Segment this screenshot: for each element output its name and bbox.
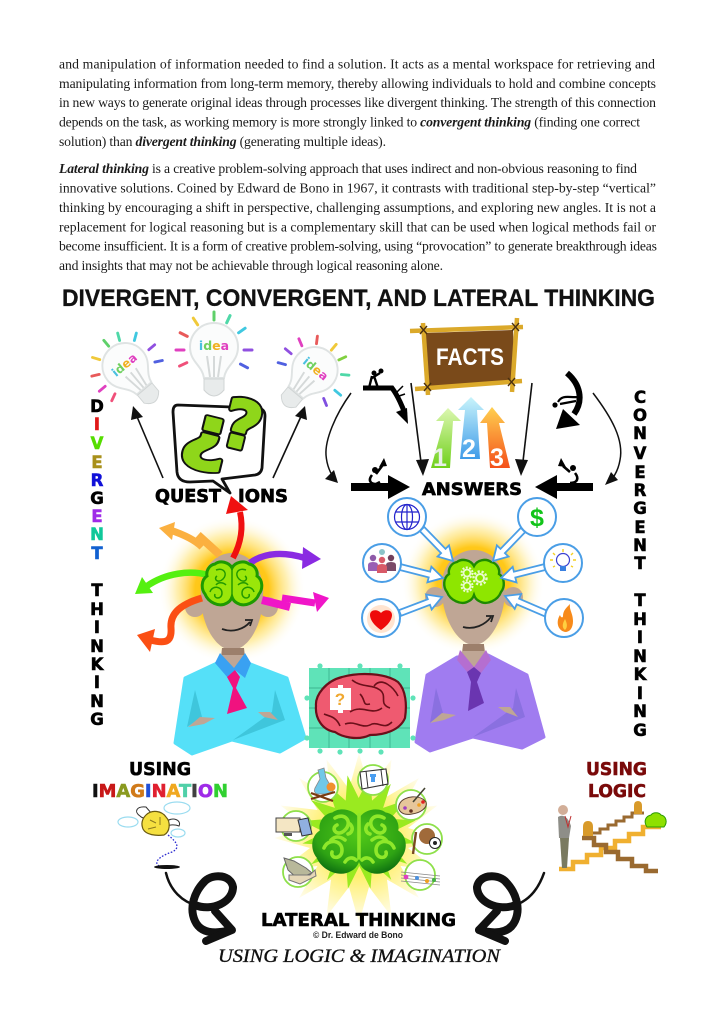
vertical label: convergent thinking: I	[637, 628, 643, 647]
head glow	[158, 516, 306, 664]
head glow	[401, 511, 545, 655]
icon: idea bulb right: idea	[300, 354, 331, 384]
label: using logic	[586, 760, 647, 802]
label: using imagination	[92, 760, 228, 802]
icon: dollar	[518, 498, 556, 536]
icon: question speech bubble: ¿	[175, 386, 241, 479]
icon: 1 2 3 arrows: 3	[490, 444, 504, 472]
vertical label: convergent thinking: E	[634, 463, 646, 482]
icon: heart	[362, 599, 400, 637]
icon: idea bulb left	[76, 317, 183, 425]
icon: flying brain with clouds	[118, 802, 190, 869]
vertical label: convergent thinking: O	[633, 406, 647, 425]
label: questions: IONS	[238, 487, 288, 507]
label: questions	[155, 487, 288, 507]
vertical label: divergent thinking: I	[94, 415, 100, 434]
smile	[463, 616, 493, 628]
arrow: right curly arrow	[477, 873, 544, 941]
vertical label: divergent thinking: N	[90, 525, 104, 544]
icon: people	[363, 544, 401, 582]
vertical label: convergent thinking	[633, 388, 648, 740]
brain	[202, 562, 262, 605]
vertical label: divergent thinking: D	[90, 397, 104, 416]
arrows: questions to ideas	[131, 406, 307, 478]
icon: flame	[545, 599, 583, 637]
icon: 1 2 3 arrows: 1	[433, 444, 447, 472]
icon: question speech bubble	[173, 384, 270, 493]
icon: idea bulb left: idea	[109, 350, 140, 380]
panel: convergent person	[362, 498, 583, 751]
arrow purple	[250, 547, 321, 569]
text block: lateral thinking paragraph	[58, 161, 657, 273]
icon: palette	[396, 788, 426, 820]
arrow magenta	[262, 592, 329, 612]
vertical label: convergent thinking: N	[633, 424, 647, 443]
text block: working memory paragraph: solution) than divergent thinking (generating multiple ideas).	[59, 134, 386, 150]
arrow: right thick arrow into answers	[535, 458, 593, 499]
label: questions: QUEST	[155, 487, 221, 507]
icon: question speech bubble: ?	[214, 384, 270, 468]
icon: books	[283, 857, 316, 887]
text block: lateral thinking paragraph: and insights that may not be achievable through logical reasoning alone.	[59, 258, 443, 273]
vertical label: convergent thinking: K	[634, 665, 648, 684]
arrow green	[135, 573, 208, 594]
vertical label: divergent thinking: G	[90, 489, 104, 508]
vertical label: divergent thinking: I	[94, 673, 100, 692]
icon: lightbulb	[544, 544, 582, 582]
text block: working memory paragraph: manipulating information from long-term memory, thereby allowing individuals to hold and combine concepts	[59, 76, 656, 91]
text block: working memory paragraph	[59, 56, 656, 150]
vertical label: convergent thinking: G	[633, 721, 647, 740]
arrow orange-red	[137, 598, 202, 652]
vertical label: divergent thinking: R	[91, 471, 104, 490]
icon: screens	[276, 811, 312, 841]
vertical label: convergent thinking: H	[633, 610, 647, 629]
vertical label: divergent thinking: N	[90, 692, 104, 711]
icon: globe	[388, 498, 426, 536]
arrow: left thick arrow into answers	[351, 458, 410, 499]
smile	[222, 620, 252, 631]
icon: facts sign	[410, 318, 523, 395]
arrow: thin curve left	[325, 393, 351, 483]
icon: jigsaw brain	[304, 663, 416, 755]
text block: lateral thinking paragraph: Lateral thinking is a creative problem-solving approach that uses indirect and non-obvious reasoning to find	[58, 161, 637, 176]
title: DIVERGENT, CONVERGENT, AND LATERAL THINKING	[62, 285, 655, 312]
shirt	[416, 655, 544, 751]
icon: music staff	[401, 860, 440, 890]
vertical label: divergent thinking: V	[91, 434, 104, 453]
text block: lateral thinking paragraph: replacement for logical reasoning but is a complementary skill that can be used when logical methods fail or	[59, 219, 656, 234]
arrow red	[226, 496, 248, 558]
vertical label: divergent thinking	[90, 397, 105, 729]
label: using logic: LOGIC	[588, 782, 646, 802]
text block: lateral thinking paragraph: become insufficient. It is a form of creative problem-solving, using “provocation” to generate breakthrough ideas	[59, 239, 657, 254]
vertical label: convergent thinking: N	[633, 536, 647, 555]
vertical label: divergent thinking: T	[91, 544, 103, 563]
text block: working memory paragraph: in new ways to generate original ideas through processes like divergent thinking. The strength of this connection	[59, 95, 656, 110]
icon: facts sign: FACTS	[436, 344, 504, 371]
text block: lateral thinking paragraph: thinking by encouraging a shift in perspective, challenging assumptions, and exploring new angles. It is not a	[59, 200, 656, 215]
vertical label: divergent thinking: I	[94, 618, 100, 637]
vertical label: divergent thinking: G	[90, 710, 104, 729]
icon: film strip	[358, 765, 388, 795]
panel: divergent person	[135, 496, 329, 754]
icon: idea bulb right	[257, 321, 364, 429]
icon: climber with curved arrow	[552, 373, 580, 429]
vertical label: divergent thinking: K	[91, 655, 105, 674]
vertical label: convergent thinking: N	[633, 702, 647, 721]
vertical label: convergent thinking: N	[633, 647, 647, 666]
label: lateral thinking: LATERAL THINKING	[261, 911, 456, 931]
label: answers: ANSWERS	[422, 480, 522, 500]
icon: question speech bubble: ?	[214, 384, 270, 468]
vertical label: convergent thinking: R	[634, 481, 647, 500]
icon: idea bulb middle: idea	[199, 338, 229, 353]
text block: working memory paragraph: and manipulation of information needed to find a solution. It acts as a mental workspace for retrieving and	[59, 56, 655, 72]
arrows: facts to answers	[411, 383, 532, 476]
vertical label: convergent thinking: V	[634, 444, 647, 463]
panel: lateral thinking brain with topics	[274, 753, 444, 923]
vertical label: divergent thinking: T	[91, 581, 103, 600]
arrows into brain	[399, 527, 548, 617]
text block: lateral thinking paragraph: innovative solutions. Coined by Edward de Bono in 1967, it contrasts with traditional step-by-step “vertical”	[59, 180, 656, 196]
vertical label: divergent thinking: N	[90, 637, 104, 656]
vertical label: convergent thinking: E	[634, 518, 646, 537]
brain with gears	[444, 560, 504, 603]
icon: flask	[308, 768, 338, 802]
head	[425, 587, 445, 607]
vertical label: convergent thinking: G	[633, 499, 647, 518]
label: using imagination: USING	[129, 760, 191, 780]
shirt	[175, 663, 305, 754]
vertical label: convergent thinking: T	[634, 554, 646, 573]
icon: dollar: $	[530, 504, 544, 532]
vertical label: divergent thinking: E	[91, 453, 103, 472]
icon: figure on cliff with arrow	[363, 368, 408, 424]
arrow: left curly arrow	[166, 873, 233, 941]
label: using logic and imagination: USING LOGIC & IMAGINATION	[218, 946, 501, 967]
vertical label: divergent thinking: H	[90, 600, 104, 619]
green brain	[312, 809, 406, 874]
icon: question speech bubble: ¿	[175, 386, 241, 479]
label: using imagination: IMAGINATION	[92, 782, 228, 802]
label: using logic: USING	[586, 760, 647, 780]
vertical label: convergent thinking: I	[637, 684, 643, 703]
vertical label: divergent thinking: E	[91, 507, 103, 526]
arrow orange	[159, 522, 220, 555]
credit: © Dr. Edward de Bono	[313, 930, 403, 940]
icon: 1 2 3 arrows: 2	[462, 435, 476, 463]
vertical label: convergent thinking: C	[634, 388, 646, 407]
icon: jigsaw brain: ?	[335, 690, 345, 709]
head	[185, 597, 205, 617]
starburst	[274, 753, 444, 923]
icon: sports balls	[412, 824, 442, 854]
arrow: thin curve right	[593, 393, 621, 485]
icon: man and stairs with logic	[558, 801, 666, 871]
icon: idea bulb middle	[176, 312, 252, 396]
text block: working memory paragraph: depends on the task, as working memory is more strongly linked to convergent thinking (finding one correct	[59, 114, 640, 130]
icon: 1 2 3 arrows	[431, 397, 510, 472]
vertical label: convergent thinking: T	[634, 591, 646, 610]
